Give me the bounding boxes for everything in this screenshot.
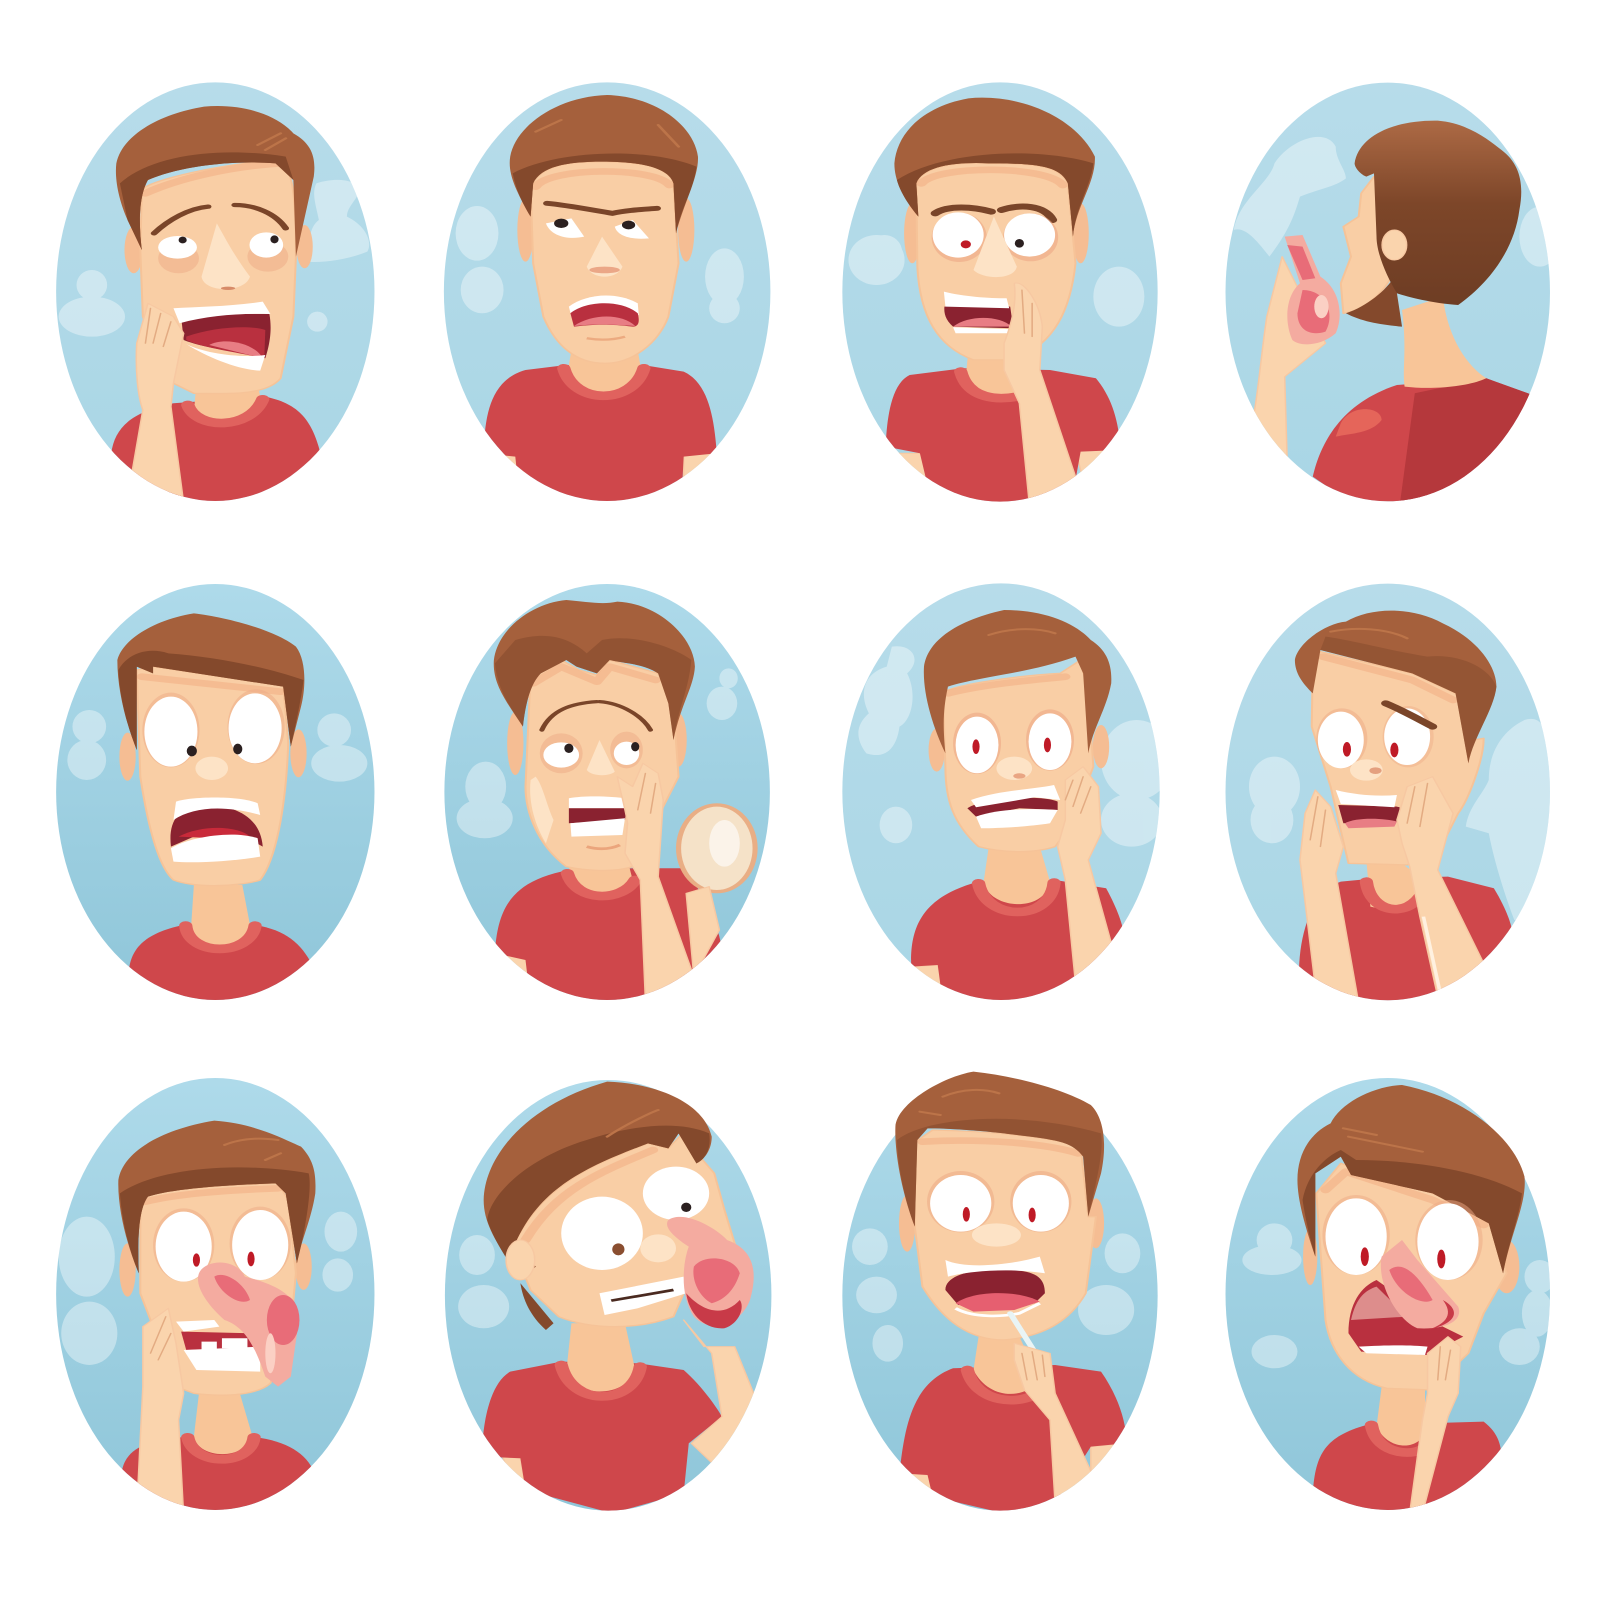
portrait 8: both hands on face: [1226, 584, 1555, 1003]
head and hair: [924, 610, 1111, 852]
shirt and neck: [1313, 297, 1537, 507]
head and hair: [894, 98, 1095, 360]
hand mirror: [679, 805, 755, 892]
hand at chin and arm: [1410, 1337, 1461, 1513]
face details: brows, eyes, nose: [154, 205, 288, 290]
open mouth: [967, 785, 1060, 828]
head from behind with hair: [1341, 121, 1521, 327]
background oval: [56, 584, 374, 1000]
eyes and nose: [927, 1171, 1071, 1247]
clouds: [59, 1212, 357, 1365]
shirt and neck: [911, 847, 1124, 1003]
eyes and nose: [142, 689, 285, 780]
clouds: [457, 668, 738, 838]
swollen tongue: [198, 1262, 299, 1387]
shirt, arms and neck: [886, 350, 1120, 507]
head and hair: [494, 600, 695, 870]
shirt and neck: [129, 885, 312, 1003]
hand on cheek and arm: [130, 303, 184, 503]
background oval: [1226, 584, 1550, 1000]
clouds: [1234, 137, 1560, 267]
portrait 9: huge tongue across face: [56, 1078, 374, 1517]
head and hair: [116, 106, 314, 394]
shirt and neck: [899, 1337, 1127, 1513]
background oval: [56, 1078, 374, 1510]
hand at chin and arm: [1014, 1343, 1093, 1503]
clouds: [59, 180, 369, 337]
hand at mouth and arm: [1004, 283, 1076, 507]
face details: brows, eyes, nose: [932, 207, 1058, 277]
clouds: [1242, 1223, 1555, 1368]
clouds: [1249, 719, 1555, 920]
hands on both cheeks and arms: [1300, 777, 1484, 1003]
portrait 11: drooling from open mouth: [842, 1072, 1158, 1513]
shirt, arm and neck: [482, 1320, 758, 1513]
portrait 2: frowning, mouth open: [444, 82, 770, 507]
portrait 3: wide eyes, hand at mouth: [842, 82, 1158, 507]
shirt and neck: [1299, 860, 1512, 1003]
portrait 1: looking up, hand on cheek, mouth wide: [56, 82, 374, 507]
eyes and nose: [953, 709, 1074, 780]
shirt and neck: [121, 1393, 314, 1517]
open mouth: [569, 796, 627, 849]
open mouth: [569, 296, 639, 340]
eyes and nose: [561, 1167, 709, 1270]
head and hair: [895, 1072, 1104, 1340]
face details: brows, eyes, nose: [546, 203, 657, 277]
background oval: [444, 584, 770, 1000]
open mouth: [1348, 1280, 1463, 1355]
portrait 5: bulging eyes, mouth open: [56, 584, 374, 1003]
hand on cheek and arm: [1058, 767, 1112, 983]
background oval: [842, 82, 1158, 502]
shirt and neck: [112, 390, 320, 501]
hand on cheek and arm: [617, 763, 719, 1000]
hair and face: [484, 1082, 740, 1330]
hand holding tongue and arm: [1254, 257, 1326, 463]
mouth with teeth: [176, 1320, 260, 1372]
clouds: [456, 206, 744, 323]
head and hair: [1297, 1085, 1525, 1390]
swollen tongue: [1381, 1240, 1459, 1330]
head and hair: [510, 95, 698, 363]
shirt and neck: [1313, 1387, 1502, 1513]
portrait 4: back of head, holding tongue: [1226, 83, 1560, 507]
clenched teeth: [599, 1277, 686, 1315]
shirt, arms and neck: [484, 350, 719, 507]
background oval: [445, 1080, 771, 1511]
eyes: [153, 1207, 291, 1282]
background oval: [1226, 1078, 1550, 1510]
background oval: [842, 1081, 1158, 1511]
open mouth: [173, 302, 271, 371]
open mouth: [944, 292, 1013, 333]
hand at cheek and arm: [138, 1308, 184, 1517]
face details: brows, eyes, nose: [540, 702, 651, 775]
background oval: [842, 583, 1160, 1000]
head and hair: [1295, 611, 1496, 865]
open mouth: [170, 797, 263, 862]
open mouth with drool: [945, 1257, 1045, 1360]
background oval: [56, 82, 374, 501]
clouds: [848, 235, 1144, 327]
clouds: [458, 1235, 509, 1328]
head and hair: [117, 613, 307, 886]
portrait 7: red pupils, hand on cheek: [842, 583, 1172, 1003]
background oval: [1226, 83, 1550, 501]
eyes: [1322, 1195, 1483, 1280]
clouds: [858, 646, 1172, 847]
shirt, mirror and neck: [495, 860, 722, 1003]
background oval: [444, 82, 770, 501]
portrait 12: tongue over nose and mouth: [1226, 1078, 1555, 1513]
face details: brow, eyes, nose: [1316, 703, 1434, 781]
portrait 6: sad face, hand on cheek, holding mirror: [444, 584, 770, 1003]
portrait 10: turned head, tongue at cheek: [445, 1080, 771, 1513]
tongue: [1285, 235, 1340, 344]
open mouth: [1336, 790, 1399, 828]
clouds: [67, 710, 367, 782]
clouds: [852, 1228, 1140, 1362]
head and hair: [118, 1121, 316, 1395]
tongue held to cheek: [667, 1217, 754, 1328]
